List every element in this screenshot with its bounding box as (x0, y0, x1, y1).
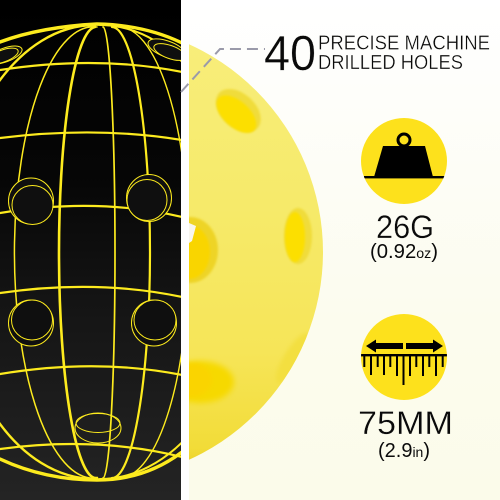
heading: 40 precise machine drilled holes (264, 27, 490, 81)
panel: dark wireframe (0, 0, 181, 500)
text: diameter in inches: (2.9in) (378, 440, 430, 462)
hole: left with white spot (189, 216, 220, 284)
wireframe holes (0, 35, 189, 443)
wireframe sphere (0, 22, 181, 482)
text: diameter 75MM: 75MM (358, 405, 453, 441)
hole: upper (214, 88, 262, 134)
heading: 40 precise machine drilled holes: DRILLED HOLES (318, 52, 463, 74)
text: weight in ounces: (0.92oz) (370, 241, 438, 263)
icon: ruler (361, 314, 447, 400)
white divider strip (181, 0, 189, 500)
dashed leader line (181, 49, 265, 92)
text: weight 26G: 26G (376, 209, 434, 245)
icon: weight (361, 118, 447, 204)
hole: right (284, 208, 312, 264)
hole: lower right (276, 332, 308, 384)
yellow ball (189, 44, 323, 460)
heading: 40 precise machine drilled holes: 40 (264, 27, 316, 81)
heading: 40 precise machine drilled holes: PRECISE MACHINE (318, 32, 490, 54)
hole: lower left (189, 358, 237, 406)
